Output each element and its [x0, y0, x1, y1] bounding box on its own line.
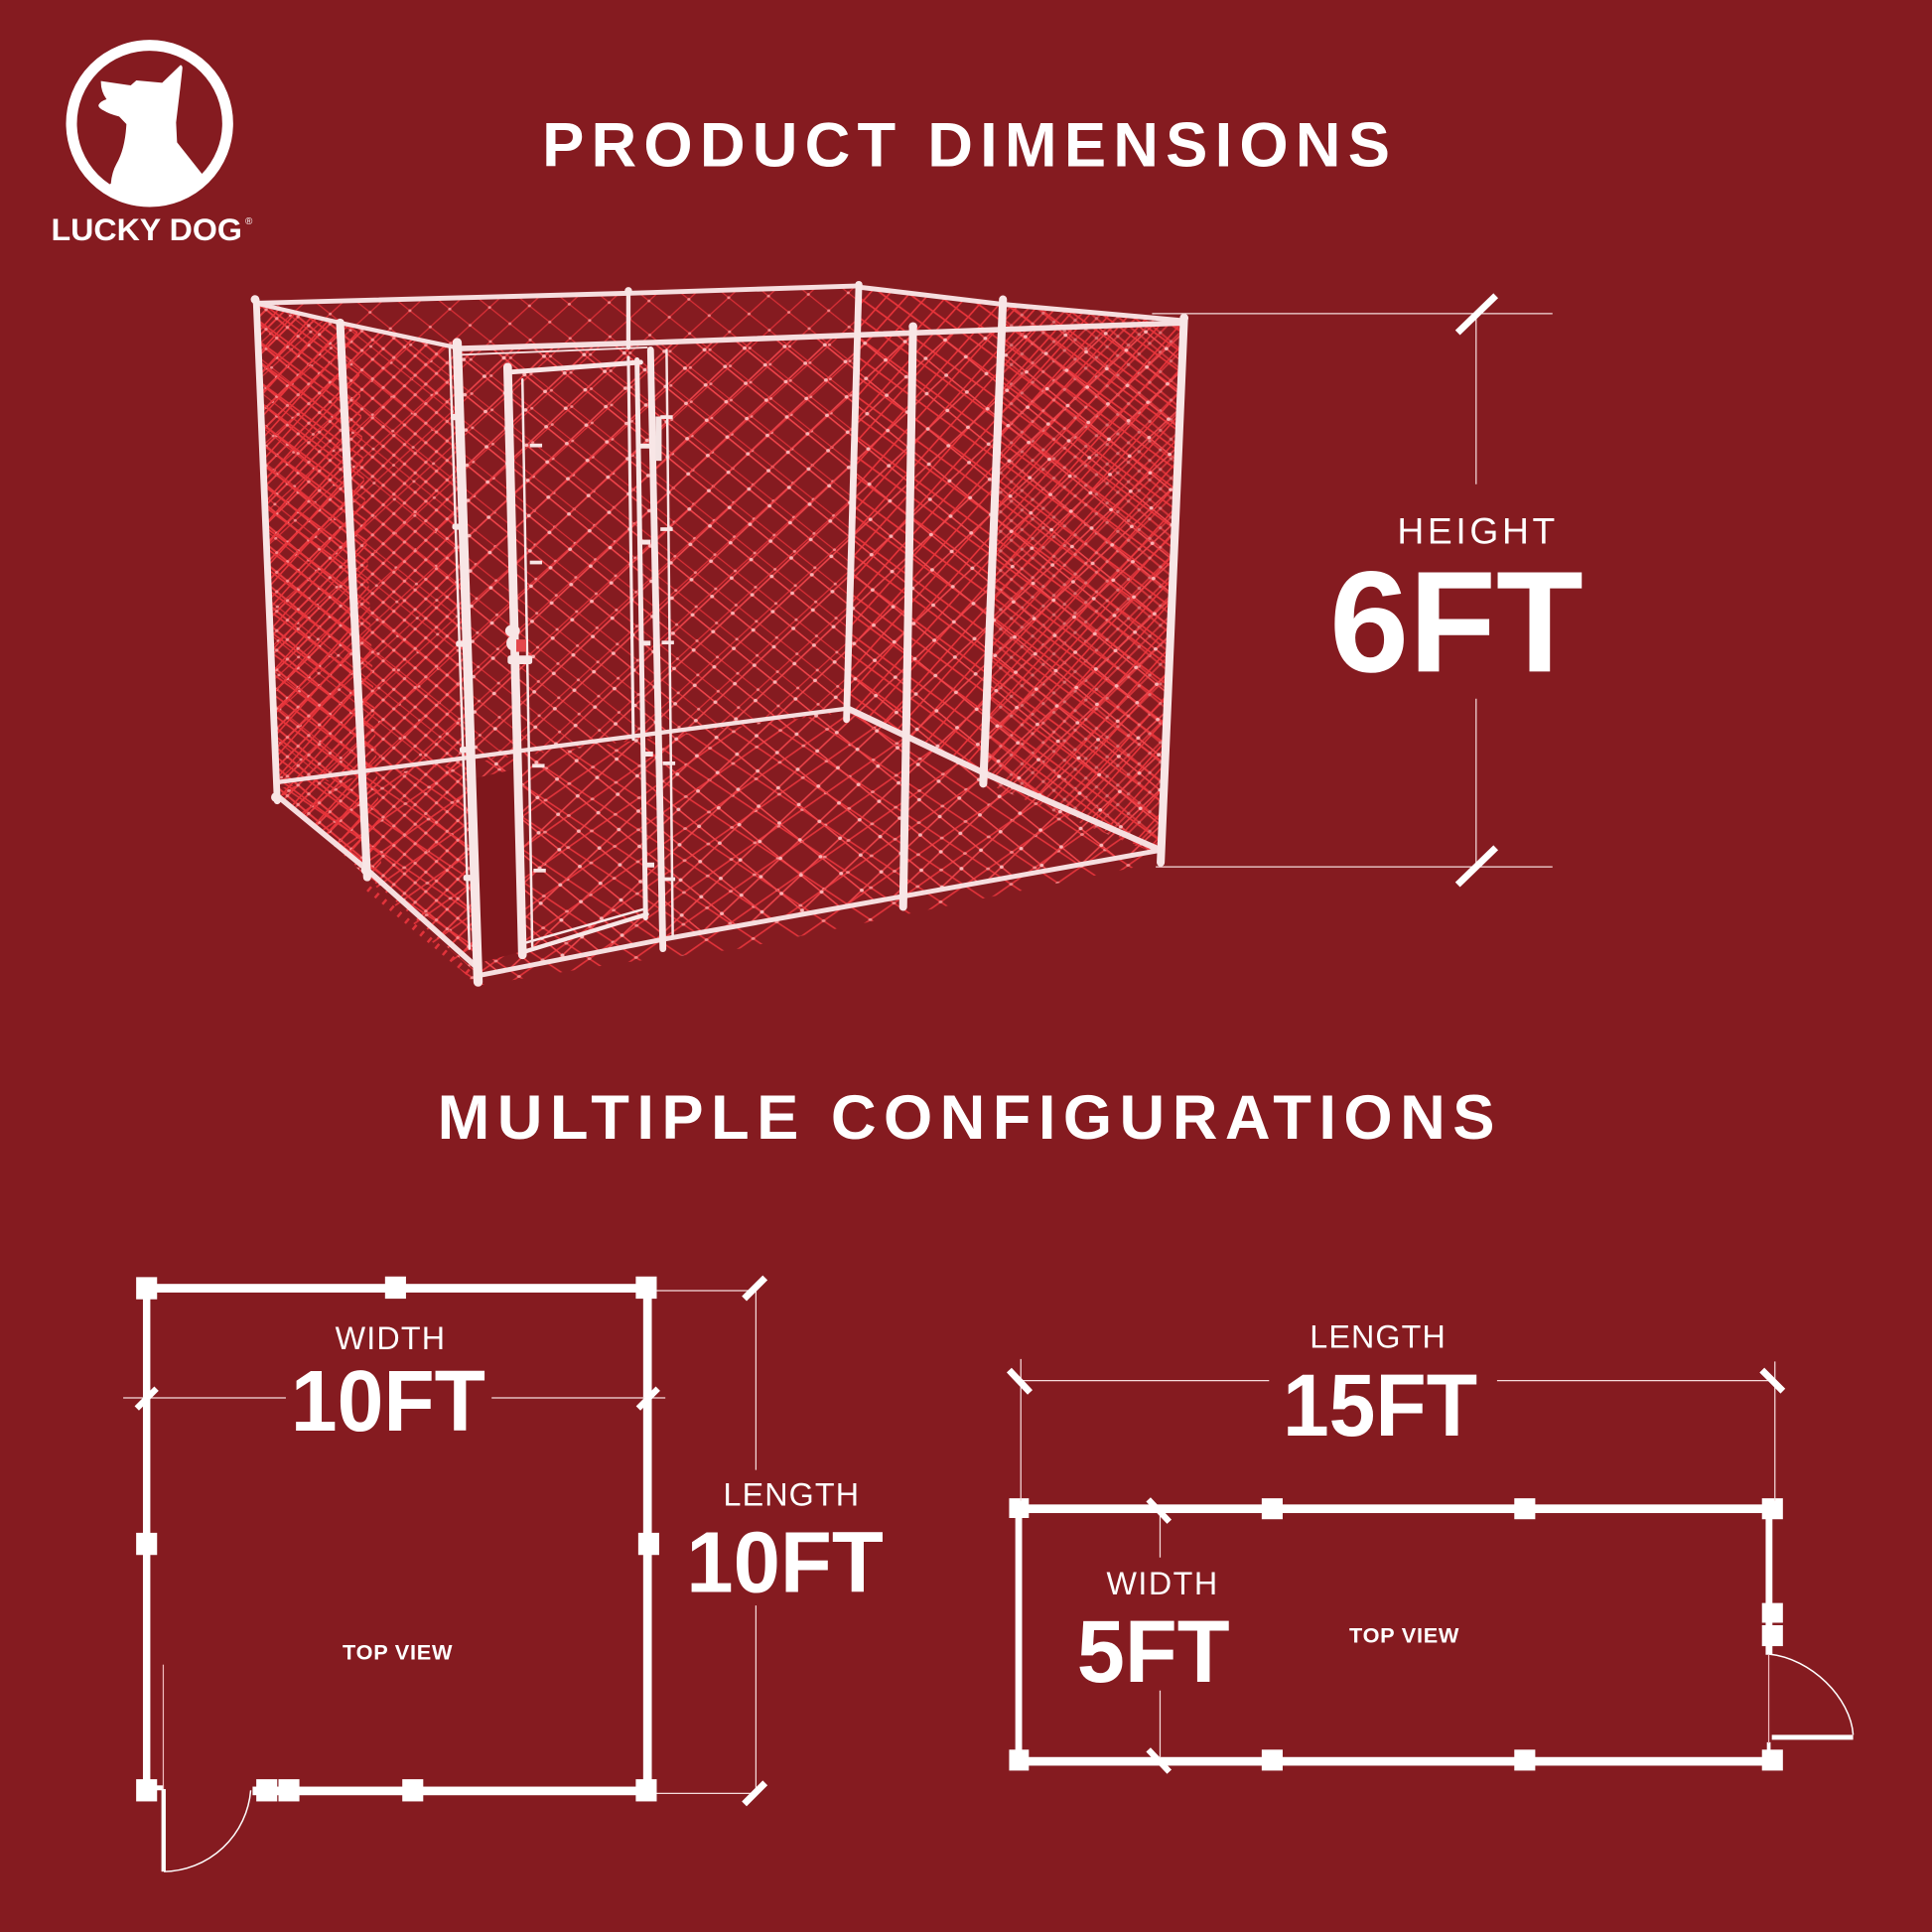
height value: 6FT [1329, 541, 1584, 702]
product tag [655, 416, 661, 461]
plan walls [136, 1277, 659, 1801]
length dimension lines [656, 1291, 756, 1793]
length value: 10FT [686, 1514, 884, 1610]
top view label: TOP VIEW [343, 1640, 453, 1665]
plan walls [1009, 1498, 1783, 1770]
left wall mesh [255, 303, 477, 973]
logo wordmark: LUCKY DOG [52, 211, 242, 247]
plan: 15 by 5 top view [1009, 1319, 1854, 1772]
length value: 15FT [1283, 1355, 1477, 1454]
gate latch [505, 624, 532, 664]
height ticks [1457, 296, 1496, 885]
width value: 10FT [291, 1353, 485, 1449]
length label: LENGTH [724, 1477, 859, 1513]
height dimension [1152, 296, 1584, 885]
width ticks [137, 1389, 658, 1409]
back wall mesh [255, 287, 859, 788]
length ticks [745, 1278, 765, 1804]
bottom wire fringe [368, 889, 471, 975]
plan: 10 by 10 top view [123, 1277, 884, 1871]
icon: dog in circle [71, 46, 227, 202]
length ticks [1009, 1370, 1783, 1392]
open gap beside door [474, 768, 522, 962]
right wall mesh [848, 287, 1184, 857]
gate [507, 357, 647, 955]
plan door [1769, 1654, 1854, 1743]
bottom rails [276, 709, 1161, 976]
height label: HEIGHT [1397, 509, 1555, 551]
registered mark: ® [245, 216, 253, 227]
front wall mesh [456, 323, 1184, 973]
kennel illustration [251, 281, 1188, 986]
width dimension lines [1159, 1509, 1161, 1759]
length label: LENGTH [1310, 1319, 1446, 1355]
plan door [150, 1665, 251, 1871]
width label: WIDTH [1106, 1566, 1217, 1601]
length dimension lines [1021, 1359, 1775, 1501]
height extension lines [1152, 314, 1553, 867]
fence posts [256, 286, 1184, 982]
logo: Lucky Dog [52, 46, 253, 247]
width dimension line [123, 1397, 665, 1399]
title: product dimensions: PRODUCT DIMENSIONS [542, 111, 1390, 181]
top view label: TOP VIEW [1349, 1622, 1459, 1647]
height measure line [1475, 314, 1477, 866]
width ticks [1149, 1499, 1170, 1772]
width label: WIDTH [336, 1320, 445, 1356]
post clamps [251, 281, 1188, 881]
top rails [255, 286, 1184, 354]
floor mesh [276, 712, 1161, 986]
width value: 5FT [1077, 1601, 1230, 1701]
heading: multiple configurations: MULTIPLE CONFIGURATIONS [438, 1083, 1494, 1153]
